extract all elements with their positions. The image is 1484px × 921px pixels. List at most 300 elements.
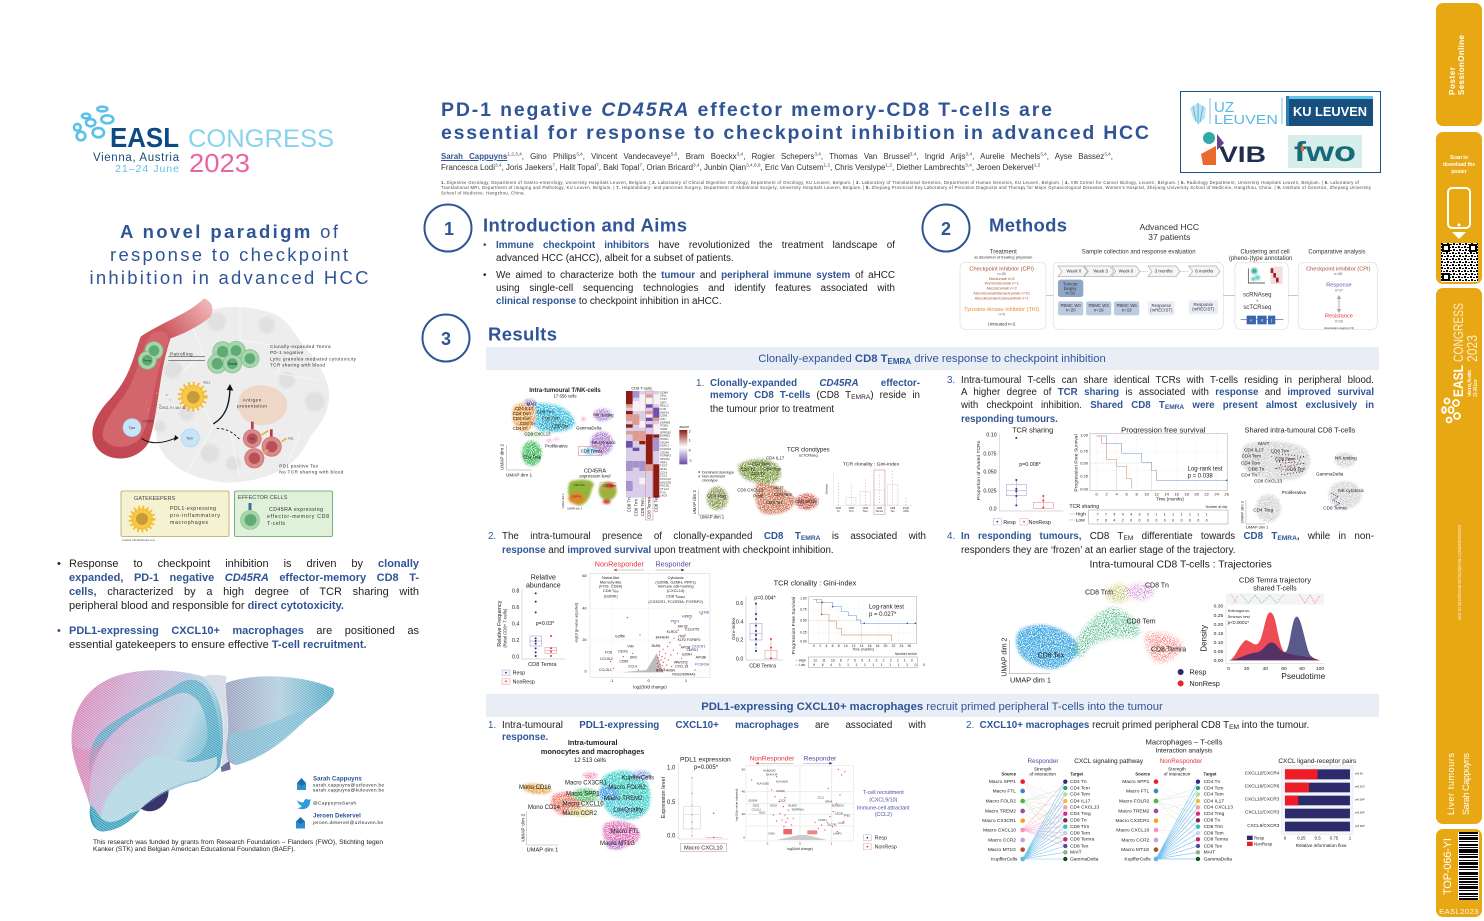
results banner 1: drive response to checkpoint inhibition bbox=[911, 353, 1106, 365]
PDL1 expression boxplot: 0.0 bbox=[667, 834, 676, 840]
result text 1: Clonally-expanded CD45RA effector- bbox=[710, 378, 920, 389]
sidebar: poster session online: Poster bbox=[1448, 67, 1457, 95]
shared T-cells UMAP: CD8 Temra bbox=[1323, 505, 1347, 510]
macrophage volcano plot: log2(fold change) bbox=[787, 847, 813, 851]
heading: methods: Methods bbox=[989, 214, 1067, 236]
section number 1: 1 bbox=[444, 219, 454, 239]
Gini-index boxplot: Temra bbox=[876, 509, 884, 513]
trajectory UMAP: CD8 Tn bbox=[1145, 583, 1169, 590]
logo: VIB bbox=[1201, 132, 1266, 167]
density plot: 100 bbox=[1316, 666, 1324, 672]
progression free survival curve bbox=[791, 597, 925, 668]
sidebar: poster session online: SessionOnline bbox=[1457, 34, 1466, 95]
ligand-receptor stacked bars: 0.5 bbox=[1315, 836, 1321, 841]
progression free survival: 2 bbox=[1106, 491, 1109, 496]
TCR clonality Gini boxplot: CD8 Temra bbox=[749, 664, 776, 670]
heatmap colour scale: 2 bbox=[689, 429, 691, 433]
blue T cells bbox=[123, 419, 199, 447]
relative abundance boxplot: p=0.03* bbox=[536, 621, 554, 627]
monocyte and macrophage UMAP: Macro TREM2 bbox=[604, 796, 643, 802]
shared T-cells UMAP: CD8 Trm bbox=[1271, 448, 1289, 453]
result text 1 bbox=[696, 378, 920, 415]
heatmap: CX3CR1 bbox=[660, 447, 672, 451]
volcano plot: BHHE40 bbox=[656, 635, 669, 639]
nonresponder chord: GammaDelta bbox=[1204, 856, 1232, 862]
progression free survival: 1.00 bbox=[1080, 433, 1089, 438]
progression free survival: Time (months) bbox=[1156, 496, 1184, 501]
responder chord: KupfferCells bbox=[991, 856, 1018, 862]
responder chord: CD4 Tcm bbox=[1070, 785, 1090, 791]
sample collection box: Week 3 bbox=[1093, 269, 1109, 274]
nonresponder chord: Macro CX3CR1 bbox=[1116, 818, 1150, 824]
macrophage text 1 bbox=[488, 720, 926, 743]
clustering box bbox=[1235, 262, 1288, 329]
T/NK UMAP: NK resting bbox=[593, 412, 614, 417]
contact: Sarah Cappuyns bbox=[297, 776, 384, 792]
illustration labels: CXCL 9 / 10 / 11 bbox=[159, 406, 186, 410]
heatmap: ZNF683 bbox=[660, 420, 671, 424]
relative abundance boxplot: Relative Frequency bbox=[497, 600, 503, 647]
illustration labels: CXCR3 bbox=[142, 419, 154, 423]
antigen presenting cell bbox=[238, 385, 287, 425]
macrophage volcano plot: CXCR1 bbox=[835, 812, 844, 815]
volcano plot: HOPX bbox=[682, 615, 693, 619]
volcano plot: VIM bbox=[627, 645, 634, 649]
shared T-cells UMAP: Proliferative bbox=[1282, 490, 1307, 495]
volcano plot: 0 bbox=[584, 668, 587, 673]
progression free survival curve: 0.00 bbox=[800, 639, 807, 643]
monocyte and macrophage UMAP: 12 513 cells bbox=[574, 758, 606, 764]
ligand-receptor stacked bars: CXCL12/CXCR4 bbox=[1245, 771, 1280, 776]
heatmap: FGFBP2 bbox=[660, 454, 671, 458]
gatekeepers box: pro-inflammatory bbox=[170, 513, 220, 519]
progression free survival: Low bbox=[1076, 518, 1085, 524]
methods flow diagram bbox=[960, 222, 1377, 330]
contact: Sarah Cappuyns: Sarah Cappuyns bbox=[313, 776, 362, 782]
density plot: 0.00 bbox=[1214, 658, 1224, 664]
volcano plot: EMRA bbox=[678, 595, 685, 599]
monocyte and macrophage UMAP: KupfferCells bbox=[622, 776, 654, 782]
illustration labels: presentation bbox=[237, 403, 267, 408]
macrophage volcano plot: HLA-DQA1 bbox=[776, 780, 789, 783]
sample collection box: Response bbox=[1194, 302, 1214, 307]
authors bbox=[441, 152, 1113, 172]
heatmap: LAG3 bbox=[660, 494, 668, 498]
shared T-cells UMAP: GammaDelta bbox=[1316, 471, 1344, 476]
results 3: TCR sharing panel bbox=[976, 425, 1365, 529]
volcano plot: BUB1 bbox=[652, 644, 661, 648]
responder chord: Macro CCR2 bbox=[988, 837, 1016, 843]
progression free survival: 24 bbox=[1214, 491, 1220, 496]
introduction text: • bbox=[483, 240, 486, 251]
progression free survival curve: 0 2 4 6 8 10 12 14 16 18 20 22 24 26 bbox=[813, 644, 911, 648]
nonresponder chord: Macro FTL bbox=[1126, 788, 1150, 794]
heading: introduction and aims: Introduction and Aims bbox=[483, 214, 687, 236]
T/NK UMAP: NK cytotoxic bbox=[592, 440, 617, 445]
monocyte and macrophage UMAP: Macro CX3CR1 bbox=[565, 781, 608, 787]
volcano plot: ITIB bbox=[678, 635, 685, 639]
comparative analysis box bbox=[1298, 262, 1377, 330]
heatmap: GPR183 bbox=[660, 430, 671, 434]
responder chord: Source bbox=[1001, 772, 1017, 777]
heatmap: HAVCR2 bbox=[660, 480, 672, 484]
illustration labels: PD1 positive Tex bbox=[279, 463, 319, 468]
heatmap: CD244 bbox=[660, 440, 669, 444]
TCR clonality Gini boxplot: TCR clonality : Gini-index bbox=[774, 579, 857, 588]
treatment box: Atezolizumab n=2 bbox=[986, 286, 1017, 290]
shared T-cells UMAP bbox=[1240, 425, 1365, 529]
sidebar: abstract id and barcode bbox=[1436, 829, 1482, 917]
shared T-cells UMAP: CD8 CXCL13 bbox=[1254, 479, 1283, 484]
volcano plot: 60 bbox=[582, 573, 587, 578]
heatmap: SPON2 bbox=[660, 457, 670, 461]
illustration labels: Temra bbox=[228, 362, 237, 366]
density plot: 0.30 bbox=[1214, 604, 1224, 610]
sidebar: abstract id and barcode: TOP-066-YI bbox=[1442, 838, 1454, 895]
result text 3: with checkpoint inhibition. Shared CD8 TEMRA were present almost exclusively in bbox=[961, 400, 1374, 411]
nonresponder chord: CD4 Tn bbox=[1204, 779, 1221, 785]
monocyte and macrophage UMAP: Macro FOLR2 bbox=[608, 785, 647, 791]
volcano plot bbox=[574, 560, 710, 690]
T/NK UMAP: CD4 Tem bbox=[513, 411, 531, 416]
volcano plot: CX3CR1 bbox=[692, 645, 705, 649]
TCR clonotypes UMAP: UMAP dim 2 bbox=[692, 490, 697, 514]
volcano plot: GZMH bbox=[682, 653, 692, 657]
progression free survival: 0 bbox=[1096, 491, 1099, 496]
density plot: 0 bbox=[1227, 666, 1230, 672]
nonresponder chord: CD4 IL17 bbox=[1204, 798, 1224, 804]
introduction text: We aimed to characterize both the tumour and peripheral immune system of aHCC bbox=[496, 270, 895, 281]
nonresponder chord: Strength bbox=[1168, 766, 1186, 771]
macrophage volcano plot: ICAM bbox=[768, 832, 775, 835]
T/NK UMAP: MAIT bbox=[527, 402, 537, 407]
macrophage volcano plot: CCL3L1 bbox=[752, 808, 761, 811]
ligand-receptor stacked bars: Resp bbox=[1254, 835, 1265, 840]
heatmap: CD8 Trm bbox=[633, 499, 638, 516]
results 2: relative abundance and volcano bbox=[497, 560, 925, 690]
macrophage volcano plot: IGHG4-34 bbox=[766, 774, 778, 777]
results 3: TCR sharing panel: TCR sharing bbox=[1012, 426, 1053, 435]
result text 3: responding tumours. bbox=[961, 414, 1058, 425]
volcano plot: (CX3CR1, FCGR3A, FGFBP2) bbox=[648, 599, 704, 604]
macrophage volcano plot: NonResponder bbox=[750, 756, 795, 763]
progression free survival curve: Log-rank test bbox=[869, 604, 904, 610]
treatment box: Untreated n=2 bbox=[988, 321, 1016, 326]
ligand-receptor stacked bars: Relative information flow bbox=[1296, 843, 1347, 848]
effector cells box: effector-memory CD8 bbox=[267, 514, 329, 520]
result text 3: 3. bbox=[947, 375, 955, 386]
trajectory UMAP: CD8 Temra bbox=[1151, 646, 1186, 653]
EASL congress logo: Vienna, Austria bbox=[93, 152, 180, 164]
responder chord: CD4 IL17 bbox=[1070, 798, 1091, 804]
TCR clonotypes UMAP: scTCRseq bbox=[799, 453, 818, 458]
responder chord: CD4 Tn bbox=[1070, 779, 1087, 785]
heading: results: Results bbox=[488, 324, 557, 344]
TCR sharing boxplot: 0.075 bbox=[983, 451, 997, 457]
TCR clonality Gini boxplot: Gini-index bbox=[731, 617, 737, 640]
nonresponder chord: of interaction bbox=[1164, 772, 1191, 777]
EASL congress logo: 21–24 June bbox=[115, 163, 179, 175]
density plot: Density bbox=[1200, 625, 1209, 652]
ligand-receptor stacked bars: p=0.004* bbox=[1355, 799, 1365, 802]
progression free survival: 14 bbox=[1164, 491, 1170, 496]
treatment box: Pembrolizumab n=1 bbox=[985, 282, 1019, 286]
poster title: essential for response to checkpoint inhibition in advanced HCC bbox=[441, 122, 1149, 144]
relative abundance boxplot: Resp bbox=[513, 671, 525, 677]
volcano plot: 20 bbox=[582, 637, 587, 642]
relative abundance boxplot: 0.0 bbox=[512, 654, 519, 660]
TCR clonality Gini boxplot: 0.0 bbox=[736, 656, 743, 662]
T/NK UMAP: CD4 IL17 bbox=[515, 406, 534, 411]
authors: Sarah Cappuyns1,2,3,4, Gino Philips3,4, Vincent Vandecaveye5,6, Bram Boeckx3,4, Rogier Schepers3,4, Thomas Van Brussel3,4, Ingrid Arijs3,4, Aurelie Mechels3,4, Ayse Bassez3,4, bbox=[441, 152, 1113, 161]
progression free survival curve: 0.25 bbox=[800, 630, 807, 634]
sample collection box bbox=[1053, 262, 1223, 329]
ligand-receptor stacked bars: CXCL16/CXCR6 bbox=[1245, 784, 1280, 789]
progression free survival: 0.75 bbox=[1080, 449, 1089, 454]
heatmap: CD8 Tem bbox=[640, 498, 645, 516]
T/NK UMAP: CD4 Tcm bbox=[513, 416, 531, 421]
heatmap: TIGIT bbox=[660, 464, 667, 468]
macrophage volcano plot: 0 bbox=[743, 835, 745, 839]
shared T-cells UMAP: UMAP dim 2 bbox=[1240, 500, 1245, 523]
heatmap: PRF1 bbox=[660, 460, 668, 464]
trajectory UMAP: UMAP dim 2 bbox=[1002, 637, 1009, 677]
contact: Sarah Cappuyns: sarah.cappuyns@uzleuven.be bbox=[313, 782, 384, 788]
progression free survival curve: 0.75 bbox=[800, 607, 807, 611]
left column bullets: • bbox=[57, 558, 61, 570]
ligand-receptor stacked bars: CXCL ligand-receptor pairs bbox=[1278, 758, 1357, 765]
methods flow diagram: 37 patients bbox=[1148, 232, 1191, 242]
illustration: immune cells in liver tissue bbox=[92, 298, 357, 483]
affiliations: Translational MRI, Department of Imaging and Pathology, KU Leuven, Belgium. | 7. Hepatobiliary- and pancreas Surgery, Department of Abdominal Surgery, University Hospitals Leuven, Belgium. | 8. Zhejiang Provincial Key Laboratory of Precision Diagnosis and Therapy for Major Gynaecological Diseases, Women's Hospital, Zhejiang University School of Medicine, Hangzhou, China. | 9. Institute of Genetics, Zhejiang University bbox=[441, 185, 1372, 190]
shared T-cells UMAP: Shared intra-tumoural CD8 T-cells bbox=[1245, 425, 1356, 434]
result text 4: responders they are ‘frozen’ at an earlier stage of the trajectory. bbox=[961, 545, 1235, 556]
PDL1 expression boxplot: 1.0 bbox=[667, 766, 676, 772]
sample collection box: (mRECIST) bbox=[1150, 308, 1173, 313]
volcano plot: FOS bbox=[605, 650, 613, 654]
gatekeepers box: macrophages bbox=[170, 520, 208, 526]
methods flow diagram: Comparative analysis bbox=[1308, 250, 1366, 256]
volcano plot: GZMK bbox=[615, 634, 626, 638]
relative abundance boxplot: abundance bbox=[526, 582, 561, 589]
Gini-index boxplot: Tem bbox=[863, 509, 869, 513]
T/NK UMAP: CD8 CXCL13 bbox=[524, 432, 551, 437]
sample collection box: n=19 bbox=[1094, 308, 1104, 313]
left column title bbox=[90, 221, 368, 288]
comparative analysis box: n=30 bbox=[1334, 272, 1342, 276]
methods flow diagram: (pheno-)type annotation bbox=[1229, 256, 1292, 262]
macrophage volcano plot: C1QC bbox=[779, 800, 786, 803]
heatmap: ANXA1 bbox=[660, 410, 670, 414]
Gini-index boxplot: Tn bbox=[837, 509, 840, 513]
TCR clonality Gini boxplot bbox=[731, 579, 857, 670]
sample collection box: 3 months bbox=[1155, 269, 1173, 274]
PDL1 expression boxplot: PDL1 expression bbox=[680, 757, 731, 764]
shared T-cells UMAP: CD4 Tn bbox=[1241, 473, 1257, 478]
macrophage volcano plot: 20 bbox=[742, 812, 745, 816]
section number 2: 2 bbox=[941, 219, 951, 239]
comparative analysis box: Resistance bbox=[1325, 314, 1353, 320]
CD45RA expression: UMAP dim 2 bbox=[561, 493, 565, 508]
heatmap: CD8 Tex bbox=[653, 495, 658, 512]
sidebar: abstract id and barcode: EASL2023 bbox=[1439, 907, 1479, 916]
contact: twitter: @CappuynsSarah bbox=[313, 800, 356, 806]
monocyte and macrophage UMAP: Mono CD14 bbox=[528, 805, 561, 811]
ligand-receptor stacked bars: 0 bbox=[1284, 836, 1287, 841]
result text 4: 4. bbox=[947, 531, 955, 542]
gatekeepers box: PDL1-expressing bbox=[170, 506, 216, 512]
legend bbox=[863, 835, 897, 851]
density plot bbox=[1200, 575, 1326, 681]
responder chord: Macro FOLR2 bbox=[986, 798, 1016, 804]
volcano plot: Responder bbox=[655, 560, 692, 569]
volcano plot: FCGR3A bbox=[695, 663, 710, 667]
volcano plot: APOBl bbox=[696, 655, 706, 659]
recruitment note: (CXCL9/10) bbox=[869, 798, 898, 804]
affiliations: 1. Digestive Oncology, Department of Gastro-enterology, University Hospitals Leuven, Belgium. | 2. Laboratory of Clinical Digestive Oncology, Department of Oncology, KU Leuven, Belgium. | 3. Laboratory of Translational Genetics, Department of Human Genetics, KU Leuven, Belgium. | 4. VIB Center for Cancer Biology, Leuven, Belgium. | 5. Radiology Department, University Hospitals Leuven, Belgium. | 6. Laboratory of bbox=[441, 180, 1360, 185]
progression free survival curve: p = 0.027* bbox=[869, 612, 897, 618]
results 1: UMAP and heatmap panel bbox=[499, 385, 913, 520]
nonresponder chord: CD8 Temra bbox=[1204, 837, 1228, 843]
result text 4: In responding tumours, CD8 TEM differentiate towards CD8 TEMRA, while in non- bbox=[961, 531, 1374, 542]
density plot: 0.05 bbox=[1214, 649, 1224, 655]
volcano plot: C12orf75 bbox=[685, 627, 699, 631]
nonresponder chord: CD4 CXCL13 bbox=[1204, 805, 1233, 811]
macrophage volcano plot: 50 bbox=[742, 767, 745, 771]
funding statement: This research was funded by grants from Research Foundation – Flanders (FWO), Stichting tegen bbox=[93, 839, 383, 846]
left column title: response to checkpoint bbox=[110, 244, 348, 265]
responder chord: of interaction bbox=[1029, 772, 1056, 777]
sample collection box: PBMC W0 bbox=[1061, 303, 1081, 308]
macrophage volcano plot: CCL3 bbox=[818, 796, 825, 799]
macrophage results panel bbox=[519, 738, 910, 854]
Gini-index boxplot: CD8 bbox=[836, 506, 841, 510]
sample collection box: Week 6 bbox=[1119, 269, 1134, 274]
left column bullets: • bbox=[57, 625, 61, 637]
treatment box: Atezolizumab/Cabozantinib n=1 bbox=[975, 296, 1029, 300]
volcano plot: GZMB bbox=[699, 610, 710, 614]
monocyte and macrophage UMAP: UMAP dim 1 bbox=[527, 848, 558, 854]
logo: FWO: fwo bbox=[1294, 136, 1356, 167]
recruitment note: (CCL2) bbox=[875, 812, 892, 818]
density plot: 0.20 bbox=[1214, 622, 1224, 628]
sidebar: congress identity: DOI:10.1016/S0168-8278(23)EASLCONGRESS2023 bbox=[1457, 524, 1462, 620]
volcano plot: SRC bbox=[630, 655, 638, 659]
heatmap: CD8 Temra bbox=[647, 497, 652, 519]
responder chord bbox=[982, 758, 1100, 862]
nonresponder chord: CD8 Tex bbox=[1204, 843, 1223, 849]
progression free survival: 26 bbox=[1224, 491, 1230, 496]
ligand-receptor stacked bars: NonResp bbox=[1254, 841, 1273, 846]
shared T-cells UMAP: NK cytotoxic bbox=[1338, 488, 1365, 493]
heatmap: CCL5 bbox=[660, 474, 668, 478]
illustration labels: Tex bbox=[249, 437, 255, 441]
volcano plot: 0 bbox=[648, 678, 651, 683]
T/NK UMAP: UMAP dim 1 bbox=[506, 472, 532, 477]
exhausted T cells bbox=[243, 422, 287, 468]
results 1: UMAP and heatmap panel: 17 656 cells bbox=[553, 393, 577, 398]
macrophage volcano plot: SERINE1A bbox=[832, 805, 844, 808]
density plot: Smirnov test bbox=[1228, 614, 1251, 619]
progression free survival: 20 bbox=[1194, 491, 1200, 496]
macrophage volcano plot: -log10 (p-value adjusted) bbox=[735, 789, 739, 822]
results 4: trajectories panel: Intra-tumoural CD8 T-cells : Trajectories bbox=[1089, 559, 1272, 570]
volcano plot: -log10 (p-value adjusted) bbox=[574, 603, 578, 643]
sample collection box: biopsy bbox=[1064, 286, 1077, 291]
PDL1 expression boxplot: p=0.005* bbox=[694, 765, 719, 771]
CD45RA expression: CD4 Tn bbox=[572, 495, 581, 499]
macrophage volcano plot: FCGR1 bbox=[818, 819, 827, 822]
ligand-receptor stacked bars: 0.25 bbox=[1297, 836, 1306, 841]
monocyte and macrophage UMAP: Mono CD16 bbox=[519, 785, 552, 791]
contact: Jeroen Dekervel bbox=[296, 812, 383, 828]
relative abundance boxplot: 0.8 bbox=[512, 589, 519, 595]
poster title bbox=[441, 99, 1149, 144]
TCR clonotypes UMAP: Dominant clonotype bbox=[702, 470, 734, 474]
TCR clonality Gini boxplot: p=0.004* bbox=[754, 596, 776, 602]
left column bullets: cells, characterized by a high degree of TCR sharing with bbox=[69, 586, 419, 598]
shared T-cells UMAP: MAIT bbox=[1258, 441, 1270, 446]
monocyte and macrophage UMAP: LowQuality bbox=[613, 807, 643, 813]
TCR clonality Gini boxplot: 0.6 bbox=[736, 601, 743, 607]
PDL1 expression boxplot: Macro CXCL10 bbox=[684, 845, 723, 851]
legend: NonResp bbox=[875, 845, 897, 851]
trajectory UMAP: CD8 Trm bbox=[1085, 590, 1113, 597]
ligand-receptor stacked bars: CXCL10/CXCR3 bbox=[1245, 797, 1280, 802]
ligand-receptor stacked bars: 1 bbox=[1349, 836, 1352, 841]
effector cells box: EFFECTOR CELLS bbox=[238, 495, 288, 501]
Gini-index boxplot: Prolif bbox=[903, 506, 909, 510]
T/NK UMAP bbox=[499, 399, 617, 477]
macrophage volcano plot: ISG15 bbox=[770, 804, 778, 807]
TCR clonotypes UMAP: UMAP dim 1 bbox=[700, 515, 725, 520]
volcano plot: (GZMB, GZMH, PRF1) bbox=[655, 579, 697, 584]
heatmap: IL7R bbox=[660, 407, 666, 411]
introduction text: clinical response to checkpoint inhibition in aHCC. bbox=[496, 296, 722, 307]
volcano plot: -1 bbox=[610, 678, 614, 683]
CD45RA expression: CD8 Temra bbox=[603, 484, 617, 488]
monocyte and macrophage UMAP: monocytes and macrophages bbox=[541, 747, 644, 756]
Gini-index boxplot: Trm bbox=[849, 509, 854, 513]
illustration labels: Clonally-expanded Temra bbox=[270, 344, 331, 349]
methods flow diagram: Treatment bbox=[990, 250, 1017, 256]
progression free survival: Progression free survival bbox=[1121, 426, 1206, 435]
illustration labels: Tpm bbox=[129, 426, 136, 430]
results banner 2: PDL1-expressing CXCL10+ macrophages recruit primed peripheral T-cells into the tumour bbox=[701, 701, 1163, 713]
monocyte and macrophage UMAP bbox=[519, 738, 654, 854]
responder chord: CD4 Tem bbox=[1070, 792, 1090, 798]
progression free survival curve: High bbox=[799, 658, 806, 662]
density plot: Pseudotime bbox=[1281, 671, 1326, 681]
illustration labels: Lytic granules mediated cytotoxicity bbox=[270, 356, 357, 361]
treatment box: n=5 bbox=[999, 312, 1005, 316]
responder chord: CD8 Tex bbox=[1070, 843, 1089, 849]
comparative analysis box: Response bbox=[1326, 283, 1352, 289]
nonresponder chord: Macro MT1G bbox=[1121, 847, 1150, 853]
T cells in vessel bbox=[138, 341, 259, 373]
illustration labels: PD-1 negative bbox=[270, 350, 304, 355]
progression free survival: Log-rank test bbox=[1188, 467, 1223, 473]
volcano plot: RGS2/MIR4A3 bbox=[672, 672, 695, 676]
TCR sharing boxplot: Resp bbox=[1003, 520, 1016, 526]
Gini-index boxplot: Tex bbox=[891, 509, 895, 513]
clustering box: scTCRseq bbox=[1243, 305, 1271, 311]
heatmap: CD8 T-cells bbox=[631, 385, 652, 390]
sample collection box: n=31 bbox=[1065, 291, 1076, 296]
CD45RA expression: CD45RA bbox=[584, 468, 606, 474]
progression free survival: p = 0.038 bbox=[1188, 473, 1213, 479]
heatmap: ITGB1 bbox=[660, 424, 669, 428]
